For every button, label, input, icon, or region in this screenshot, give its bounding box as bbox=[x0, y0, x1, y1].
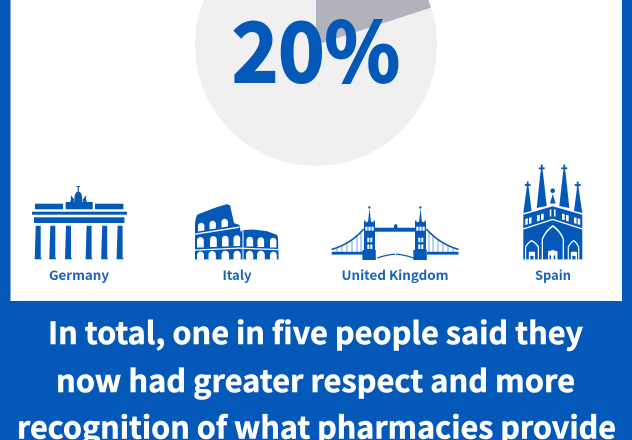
label: United Kingdom: United Kingdom bbox=[342, 265, 448, 284]
icon: Brandenburg Gate, Germany bbox=[32, 186, 127, 259]
icon: Tower Bridge, United Kingdom bbox=[332, 206, 458, 260]
icon: Colosseum, Italy bbox=[195, 204, 279, 259]
statement text bbox=[17, 309, 616, 440]
label: Spain: Spain bbox=[535, 265, 571, 284]
statement text: now had greater respect and more bbox=[56, 357, 575, 401]
white panel bbox=[10, 0, 622, 301]
pie chart: 20 percent bbox=[195, 0, 437, 166]
icon: Sagrada Familia, Spain bbox=[523, 164, 582, 259]
label: Italy: Italy bbox=[222, 265, 252, 284]
label: Germany: Germany bbox=[49, 265, 110, 284]
statement text: In total, one in five people said they bbox=[48, 309, 583, 353]
